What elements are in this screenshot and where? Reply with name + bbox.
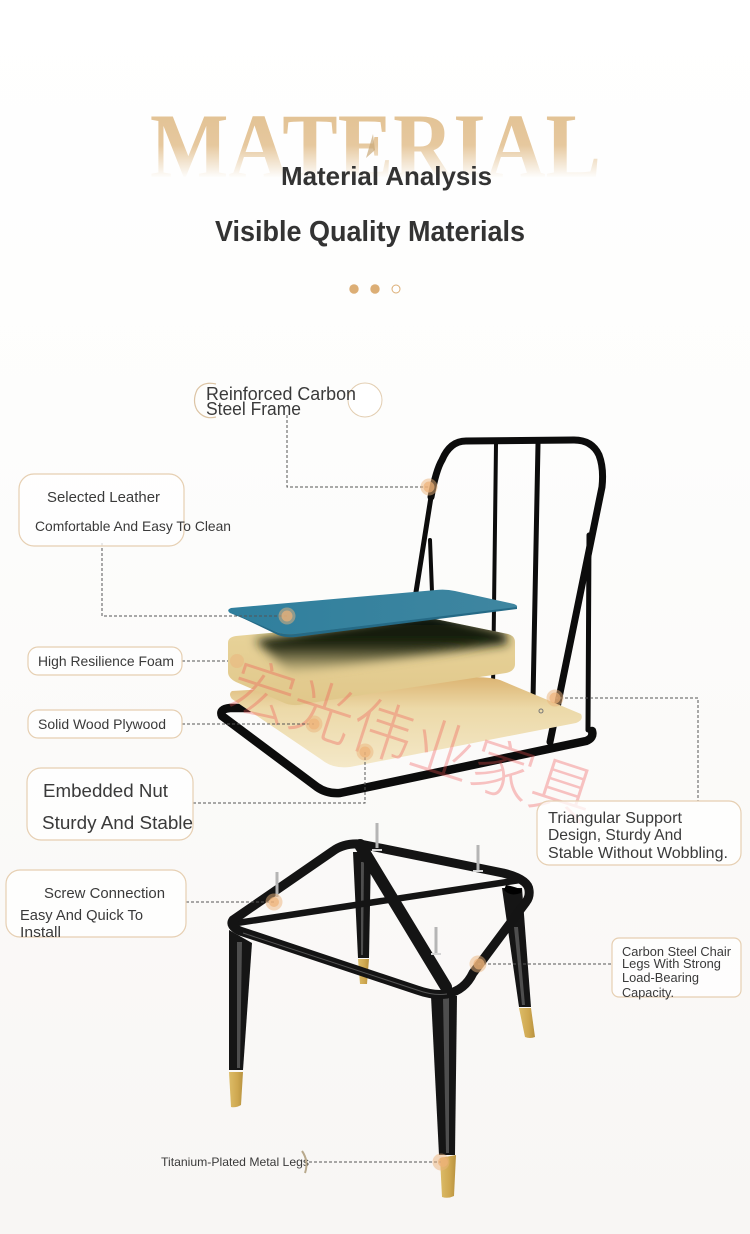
callout: screw connection bbox=[6, 870, 186, 941]
leg frame: front legs bbox=[229, 930, 457, 1198]
callout: solid wood plywood bbox=[28, 710, 182, 738]
leg frame: rear legs bbox=[353, 852, 535, 1038]
callout: carbon steel chair legs bbox=[612, 938, 741, 1000]
callout: triangular support: Design, Sturdy And bbox=[548, 827, 682, 844]
marker dots bbox=[230, 478, 564, 1170]
callout: titanium-plated metal legs: Titanium-Plated Metal Legs bbox=[161, 1155, 309, 1169]
leg frame: top ring and crossbars bbox=[232, 844, 529, 994]
plywood seat board bbox=[230, 677, 582, 767]
title watermark: MATERIAL: MATERIAL bbox=[150, 95, 601, 197]
callout: screw connection: Install bbox=[20, 924, 61, 941]
callout: carbon steel chair legs: Load-Bearing bbox=[622, 971, 699, 985]
leader lines bbox=[102, 415, 698, 1162]
chair back and base frame bbox=[221, 440, 603, 793]
blue leather seat top bbox=[228, 590, 517, 637]
callout: reinforced carbon steel frame: Reinforced Carbon bbox=[206, 384, 356, 404]
callout: embedded nut bbox=[27, 768, 193, 840]
callout: reinforced carbon steel frame bbox=[194, 383, 382, 419]
callout: embedded nut: Sturdy And Stable bbox=[42, 813, 193, 833]
callout: screw connection: Screw Connection bbox=[44, 885, 165, 902]
callout: reinforced carbon steel frame: Steel Frame bbox=[206, 399, 301, 419]
callout: selected leather: Selected Leather bbox=[47, 490, 160, 506]
callout: selected leather: Comfortable And Easy To Clean bbox=[35, 518, 231, 534]
watermark text: 宏光伟业家具 bbox=[220, 636, 608, 839]
heading: Visible Quality Materials: Visible Quality Materials bbox=[215, 216, 525, 248]
callout: triangular support: Triangular Support bbox=[548, 810, 683, 827]
pagination dots bbox=[349, 284, 400, 294]
callout: high resilience foam bbox=[28, 647, 182, 675]
callout: high resilience foam: High Resilience Foam bbox=[38, 653, 174, 669]
icon: mounting bolts bbox=[276, 823, 483, 955]
callout: carbon steel chair legs: Legs With Strong bbox=[622, 957, 721, 971]
heading: Material Analysis: Material Analysis bbox=[281, 161, 492, 191]
callout: embedded nut: Embedded Nut bbox=[43, 781, 168, 801]
callout: triangular support bbox=[537, 801, 741, 865]
callout: carbon steel chair legs: Carbon Steel Chair bbox=[622, 945, 731, 959]
callout: screw connection: Easy And Quick To bbox=[20, 907, 143, 924]
callout: solid wood plywood: Solid Wood Plywood bbox=[38, 716, 166, 732]
high resilience foam bbox=[228, 612, 515, 705]
callout: titanium-plated metal legs bbox=[161, 1151, 309, 1173]
callout: carbon steel chair legs: Capacity. bbox=[622, 986, 674, 1000]
callout: selected leather bbox=[19, 474, 231, 546]
callout: triangular support: Stable Without Wobbling. bbox=[548, 845, 728, 862]
